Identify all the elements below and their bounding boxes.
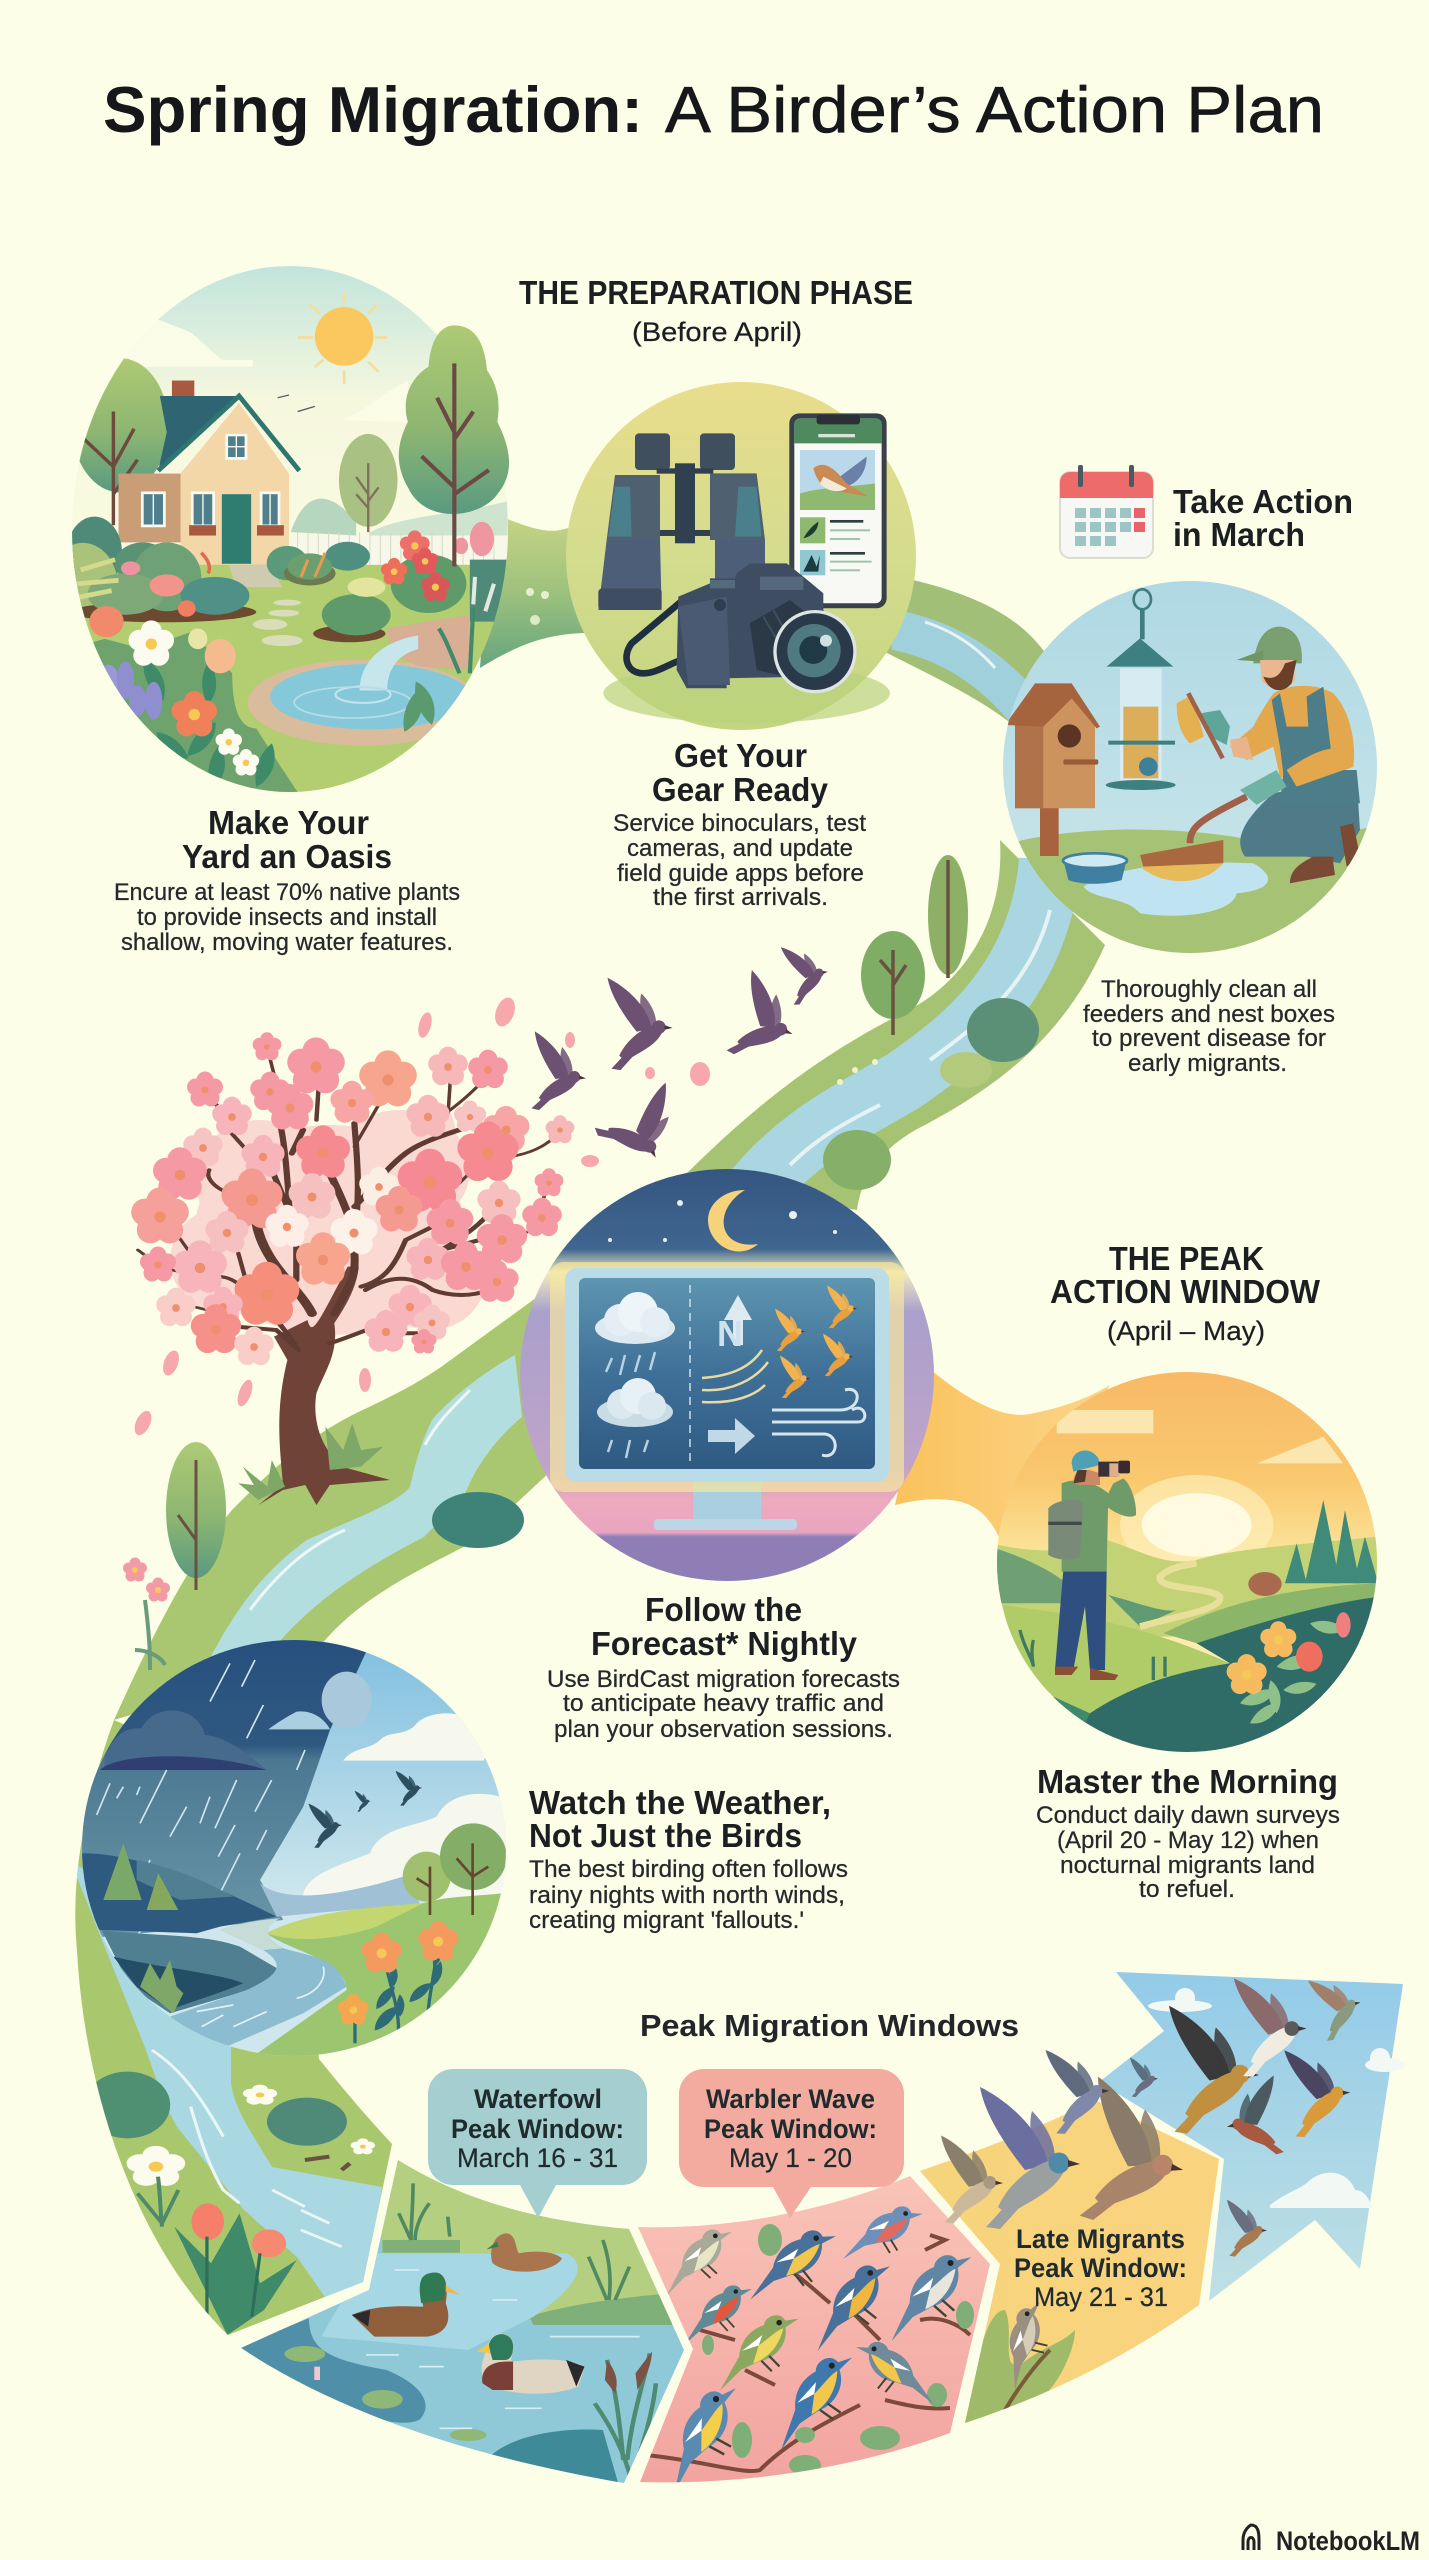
heading: peak action window: ACTION WINDOW xyxy=(1050,1273,1321,1310)
text: make your yard an oasis: shallow, moving water features. xyxy=(121,929,453,956)
clouds on arrow xyxy=(1148,1988,1405,2208)
segment: river start of migration arrow xyxy=(75,1720,392,2335)
duck: mallard right xyxy=(476,2334,584,2394)
birder figure xyxy=(1048,1450,1136,1680)
icon: phone xyxy=(789,413,887,608)
icon: binoculars xyxy=(598,433,765,610)
text: master the morning: Master the Morning xyxy=(1037,1763,1338,1800)
icon: water bowl xyxy=(1063,853,1127,884)
text: take action in March: in March xyxy=(1173,516,1305,553)
flowers xyxy=(1020,1609,1351,1724)
text: clean feeders xyxy=(1083,976,1335,1077)
text: take action in March xyxy=(1173,483,1353,553)
segment: arrow head xyxy=(1099,1972,1403,2301)
segment: late migrants xyxy=(915,2095,1220,2430)
icon: sun xyxy=(298,291,387,384)
text: master the morning: Conduct daily dawn surveys xyxy=(1036,1802,1340,1829)
label: late migrants xyxy=(1014,2224,1187,2312)
callout: waterfowl: Peak Window: xyxy=(451,2114,624,2144)
illustration: blossom tree xyxy=(131,995,710,1505)
text: follow the forecast: to anticipate heavy traffic and xyxy=(563,1690,884,1717)
path band: river from clean station to forecast xyxy=(680,840,1105,1210)
text: master the morning: to refuel. xyxy=(1139,1876,1235,1903)
birds xyxy=(308,1769,424,1848)
path band: gear to clean station xyxy=(885,578,1050,740)
text: make your yard an oasis: to provide insects and install xyxy=(137,904,437,931)
callout: waterfowl xyxy=(428,2069,647,2218)
text: watch the weather: The best birding often follows xyxy=(529,1856,848,1883)
monitor xyxy=(550,1262,904,1492)
flowers xyxy=(81,606,440,797)
heading: peak action window: (April – May) xyxy=(1107,1316,1265,1346)
text: get your gear ready: Service binoculars, test xyxy=(613,810,866,837)
panel: weather scene xyxy=(70,1640,510,2080)
heading: peak migration windows: Peak Migration Windows xyxy=(640,2008,1019,2043)
icon: birdhouse xyxy=(1005,683,1100,856)
fence xyxy=(291,532,508,565)
callout: waterfowl: Waterfowl xyxy=(474,2084,602,2114)
text: follow the forecast: Follow the xyxy=(645,1591,802,1628)
text: clean feeders: to prevent disease for xyxy=(1092,1025,1326,1052)
text: get your gear ready: Get Your xyxy=(674,737,807,774)
text: follow the forecast: Use BirdCast migration forecasts xyxy=(547,1666,900,1693)
segment: warbler wave xyxy=(630,2170,995,2492)
storm cloud xyxy=(100,1710,267,1770)
text: make your yard an oasis: Make Your xyxy=(208,804,369,841)
text: get your gear ready: Gear Ready xyxy=(652,771,829,808)
label: late migrants: Late Migrants xyxy=(1016,2224,1185,2254)
yard foreground over tree base xyxy=(439,577,501,673)
heading: preparation phase xyxy=(519,274,913,347)
panel: yard oasis scene xyxy=(72,266,510,792)
clouds xyxy=(303,1713,510,1900)
text: watch the weather: rainy nights with north winds, xyxy=(529,1882,845,1909)
heading: preparation phase: (Before April) xyxy=(632,317,802,347)
tree: tall tree overlapping rim xyxy=(399,325,509,567)
text: master the morning: nocturnal migrants land xyxy=(1060,1852,1315,1879)
hills xyxy=(260,1877,420,1917)
flowers xyxy=(338,1921,458,2043)
callout: warbler wave: Peak Window: xyxy=(704,2114,877,2144)
icon: camera xyxy=(627,563,857,693)
callout: warbler wave xyxy=(679,2069,904,2218)
garden beds xyxy=(67,517,508,646)
panel: forecast circle xyxy=(515,1165,940,1585)
text: get your gear ready: field guide apps before xyxy=(617,860,864,887)
panel: morning scene xyxy=(990,1370,1380,1760)
text: make your yard an oasis xyxy=(114,804,460,956)
heading: peak action window xyxy=(1050,1240,1321,1346)
text: clean feeders: Thoroughly clean all xyxy=(1101,976,1317,1003)
text: get your gear ready xyxy=(613,737,866,911)
panel: clean feeders scene xyxy=(1003,581,1377,953)
icon: puddle xyxy=(1083,862,1268,916)
heading: preparation phase: THE PREPARATION PHASE xyxy=(519,274,913,311)
trees xyxy=(403,1823,507,1915)
text: watch the weather: Watch the Weather, xyxy=(529,1784,831,1821)
path band: yard to gear xyxy=(480,512,600,668)
title: Spring Migration: xyxy=(103,73,643,146)
text: make your yard an oasis: Yard an Oasis xyxy=(182,838,392,875)
icon: pond and waterfall xyxy=(248,615,478,746)
path band: forecast to morning xyxy=(895,1365,1110,1570)
panel: gear circle xyxy=(566,382,916,730)
monitor: N xyxy=(717,1313,743,1354)
text: get your gear ready: the first arrivals. xyxy=(653,884,828,911)
icon: calendar xyxy=(1060,465,1153,558)
blossoms xyxy=(131,1032,574,1365)
label: late migrants: May 21 - 31 xyxy=(1034,2282,1168,2312)
text: master the morning xyxy=(1036,1763,1340,1903)
text: watch the weather: Not Just the Birds xyxy=(529,1817,802,1854)
callout: warbler wave: Warbler Wave xyxy=(706,2084,875,2114)
title xyxy=(103,73,1324,146)
icon: scrub brush xyxy=(1140,797,1247,881)
title: A Birder’s Action Plan xyxy=(665,73,1324,146)
text: watch the weather xyxy=(529,1784,848,1934)
text: follow the forecast xyxy=(547,1591,900,1743)
house xyxy=(119,381,299,587)
text: take action in March: Take Action xyxy=(1173,483,1353,520)
text: get your gear ready: cameras, and update xyxy=(627,835,853,862)
callout: waterfowl: March 16 - 31 xyxy=(457,2143,618,2173)
label: late migrants: Peak Window: xyxy=(1014,2253,1187,2283)
worker xyxy=(1177,627,1360,883)
migrating birds xyxy=(941,1969,1368,2257)
text: follow the forecast: plan your observation sessions. xyxy=(554,1716,893,1743)
trunk and branches xyxy=(138,1057,555,1505)
segment: waterfowl pond xyxy=(241,2160,684,2483)
far hills and pines xyxy=(997,1549,1062,1604)
heading: peak action window: THE PEAK xyxy=(1109,1240,1264,1277)
text: follow the forecast: Forecast* Nightly xyxy=(591,1625,858,1662)
text: master the morning: (April 20 - May 12) when xyxy=(1057,1827,1319,1854)
icon: feeder xyxy=(1106,589,1176,790)
icon: sun xyxy=(1120,1475,1274,1562)
duck: female xyxy=(487,2233,562,2272)
illustration: flock of birds xyxy=(528,940,833,1177)
icon: moon xyxy=(708,1190,758,1251)
path band: river from forecast to weather xyxy=(114,1295,552,1720)
text: make your yard an oasis: Encure at least 70% native plants xyxy=(114,879,460,906)
text: clean feeders: feeders and nest boxes xyxy=(1083,1001,1335,1028)
falling petals xyxy=(131,995,710,1438)
duck: mallard left xyxy=(352,2273,460,2337)
text: watch the weather: creating migrant 'fallouts.' xyxy=(529,1907,804,1934)
text: clean feeders: early migrants. xyxy=(1128,1050,1287,1077)
callout: warbler wave: May 1 - 20 xyxy=(729,2143,852,2173)
